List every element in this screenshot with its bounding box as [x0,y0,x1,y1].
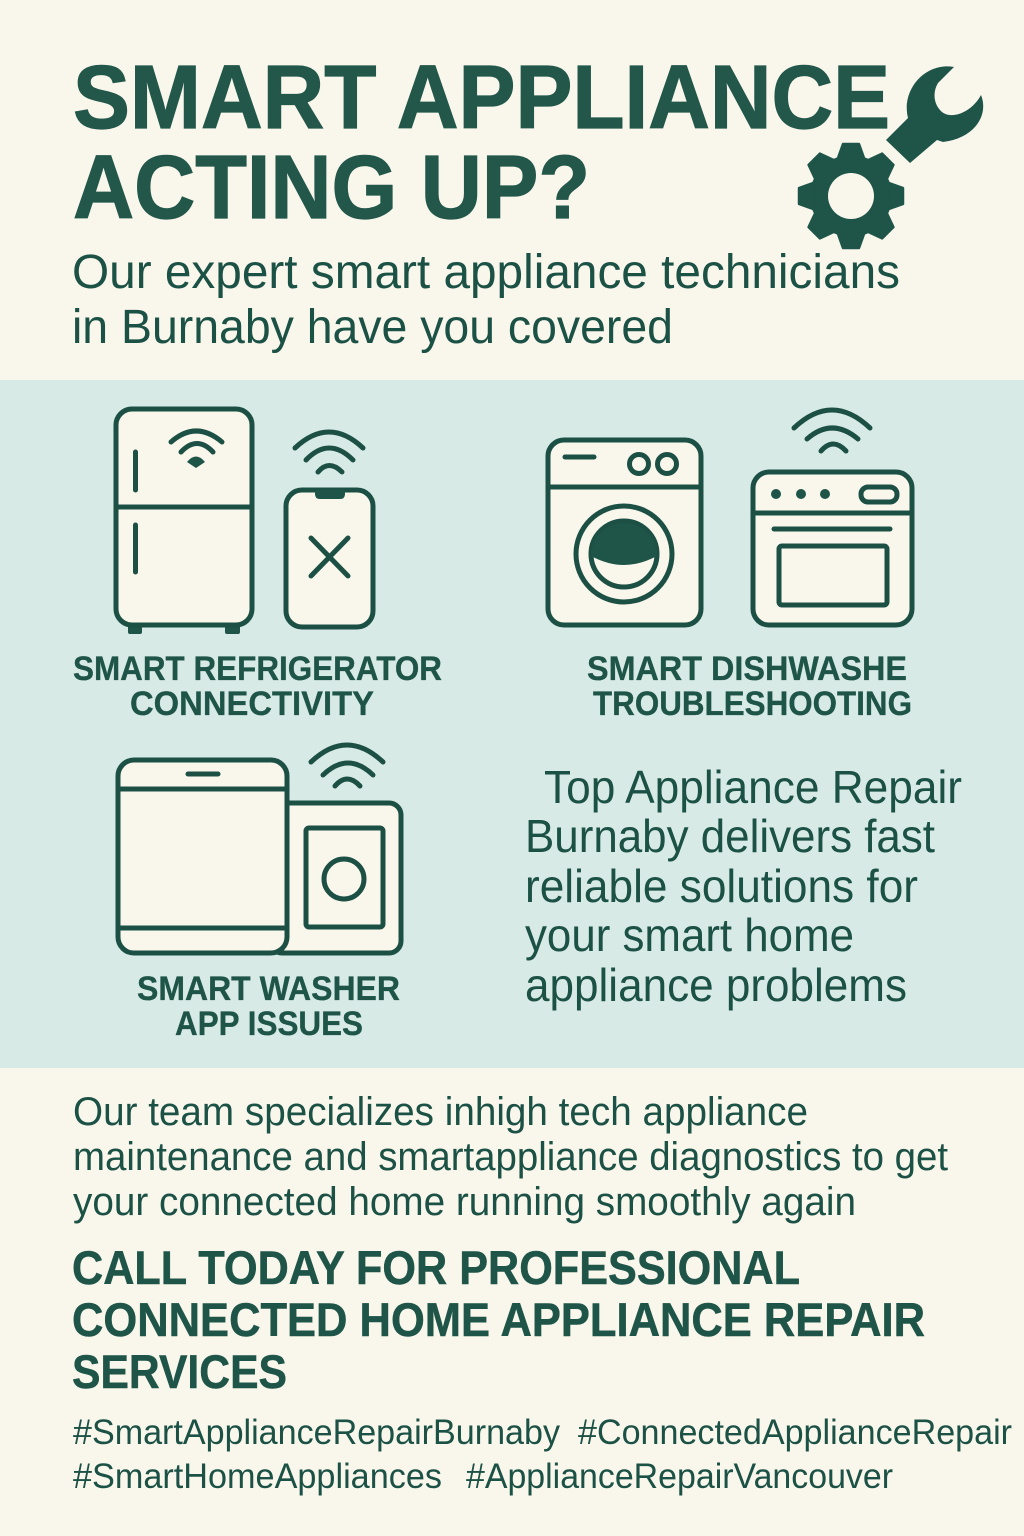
panel: teal services band [0,380,1024,1068]
icon: smart oven [753,410,912,625]
icon: smart refrigerator [116,409,252,634]
call to action: CALL TODAY FOR PROFESSIONAL [72,1241,800,1294]
subtitle: in Burnaby have you covered [72,301,673,354]
icon: smart washer [548,440,701,625]
title [73,48,890,238]
label: smart dishwasher [587,650,912,723]
hashtags [73,1413,1012,1496]
text block: top appliance repair: appliance problems [525,959,907,1011]
text block: top appliance repair: Burnaby delivers fast [525,810,935,862]
subtitle: Our expert smart appliance technicians [72,246,900,299]
icon: wrench and gear [799,66,983,248]
call to action: SERVICES [72,1345,287,1398]
icon: phone with failed connection [286,432,373,627]
label: smart washer: SMART WASHER [137,970,400,1008]
call to action [72,1241,925,1398]
icon: wrench [886,66,983,163]
label: smart refrigerator: CONNECTIVITY [130,685,374,723]
text block: top appliance repair: your smart home [525,909,854,961]
subtitle [72,246,900,354]
hashtags: #ApplianceRepairVancouver [466,1457,893,1496]
text block: top appliance repair: reliable solutions for [525,860,918,912]
label: smart washer: APP ISSUES [175,1005,363,1043]
text block: team specialization: Our team specializes inhigh tech appliance [73,1090,808,1134]
hashtags: #ConnectedApplianceRepair [578,1413,1012,1452]
title: ACTING UP? [73,138,590,238]
text block: top appliance repair: Top Appliance Repair [544,761,962,813]
text block: team specialization [73,1090,948,1224]
text block: team specialization: maintenance and smartappliance diagnostics to get [73,1135,948,1179]
label: smart refrigerator [73,650,442,723]
hashtags: #SmartApplianceRepairBurnaby [73,1413,560,1452]
label: smart dishwasher: TROUBLESHOOTING [593,685,912,723]
label: smart dishwasher: SMART DISHWASHE [587,650,907,688]
hashtags: #SmartHomeAppliances [73,1457,442,1496]
label: smart washer [137,970,400,1043]
text block: top appliance repair [525,761,962,1011]
icon: gear [799,144,903,248]
title: SMART APPLIANCE [73,48,890,148]
label: smart refrigerator: SMART REFRIGERATOR [73,650,442,688]
text block: team specialization: your connected home running smoothly again [73,1180,856,1224]
call to action: CONNECTED HOME APPLIANCE REPAIR [72,1293,925,1346]
icon: smart dishwasher and washer app [118,745,401,953]
